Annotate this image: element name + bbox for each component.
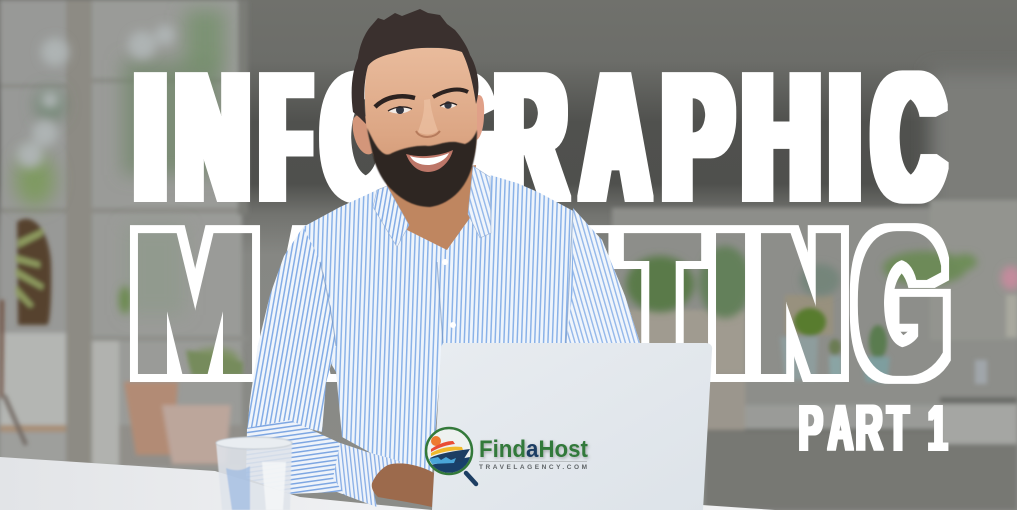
subtitle: PART 1: P: [799, 392, 823, 464]
logo tagline: TRAVELAGENCY.COM: [479, 464, 587, 471]
title: MARKETING outlined: G: [858, 194, 945, 413]
head: hair: [352, 9, 478, 124]
title: INFOGRAPHIC: F: [262, 37, 309, 238]
title: MARKETING outlined: K: [466, 194, 543, 413]
logo rule: [479, 460, 587, 463]
subtitle: PART 1: A: [828, 392, 853, 464]
head: smile: [406, 150, 453, 172]
shirt fold shadows: [320, 210, 573, 346]
title: MARKETING outlined: M: [133, 194, 257, 413]
head: eyes and brows: [375, 90, 468, 137]
glass of water: [216, 437, 292, 510]
bokeh dots: [17, 25, 175, 168]
shirt torso: [285, 175, 640, 475]
collar right: [468, 166, 491, 238]
title: INFOGRAPHIC: I: [134, 37, 167, 238]
left foliage with bokeh: [15, 10, 225, 315]
head: face: [365, 48, 477, 205]
laptop: [432, 343, 712, 510]
shirt buttons: [396, 226, 484, 328]
table top right sliver: [702, 505, 775, 510]
title: INFOGRAPHIC: A: [583, 37, 648, 238]
title: INFOGRAPHIC: R: [496, 37, 565, 238]
logo icon: magnifier with cruise ship: [425, 428, 476, 484]
title: INFOGRAPHIC: O: [322, 37, 409, 238]
hand: [372, 463, 434, 507]
head: ears: [353, 115, 373, 154]
man in striped shirt: [246, 9, 640, 507]
head: beard: [367, 128, 477, 207]
subtitle: PART 1: R: [856, 392, 883, 464]
logo wordmark: FindaHost: [479, 436, 588, 463]
title: INFOGRAPHIC: H: [743, 37, 820, 238]
table top: [0, 457, 432, 510]
logo: FindaHost Travel Agency: [425, 428, 588, 484]
subtitle: PART 1: 1: [928, 392, 947, 464]
right sleeve: [566, 208, 640, 343]
title: MARKETING outlined: E: [564, 194, 607, 413]
right wall lightening: [930, 70, 1017, 240]
title: MARKETING outlined: A: [275, 194, 354, 413]
left sleeve: [247, 227, 336, 432]
title: INFOGRAPHIC: G: [412, 37, 496, 238]
title: MARKETING outlined: I: [712, 194, 749, 413]
right counter and shelf: [612, 200, 1017, 510]
forearm: [246, 420, 403, 507]
title: INFOGRAPHIC: P: [663, 37, 732, 238]
subtitle: PART 1: T: [887, 392, 909, 464]
left plant trunk and pots: [0, 219, 243, 464]
left window panes: [0, 0, 248, 470]
title: MARKETING outlined: N: [758, 194, 844, 413]
title: INFOGRAPHIC: N: [176, 37, 249, 238]
neck: [385, 165, 476, 250]
title: INFOGRAPHIC: C: [874, 37, 943, 238]
title: INFOGRAPHIC: I: [830, 37, 860, 238]
cuff: [333, 443, 403, 507]
title: MARKETING outlined: T: [628, 194, 697, 413]
title: MARKETING outlined: R: [370, 194, 453, 413]
collar left: [373, 186, 409, 247]
